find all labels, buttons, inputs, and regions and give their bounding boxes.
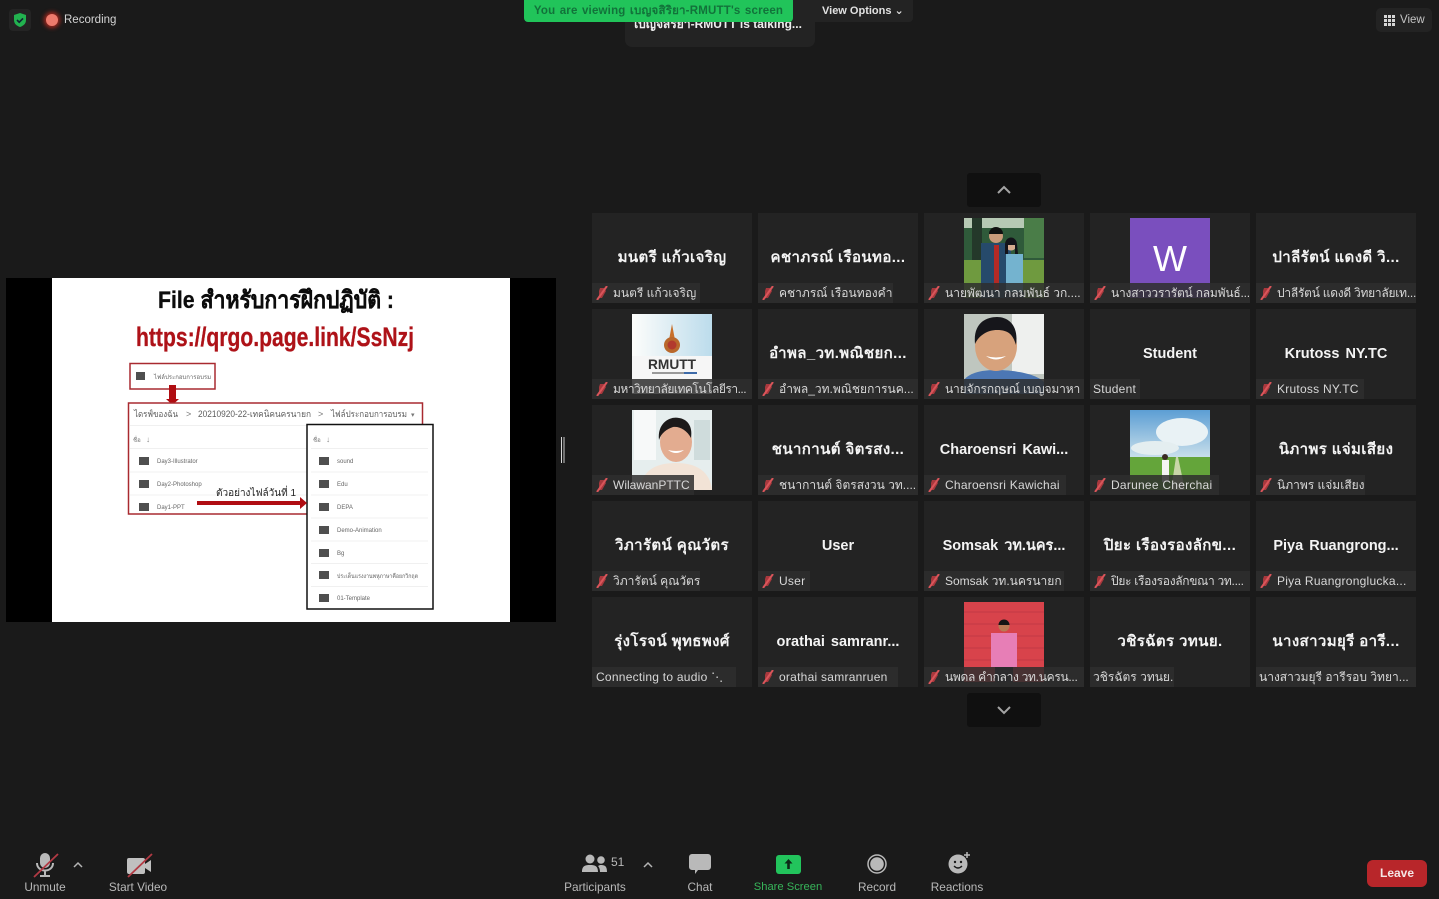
top bar: security shield <box>9 9 31 31</box>
participant tile: Krutoss NY.TC <box>1285 346 1387 362</box>
participant tile <box>1256 405 1416 495</box>
participant tile with red wall photo: นพดล คำกลาง วท.นครน... <box>945 670 1077 684</box>
participant tile: User <box>779 574 805 588</box>
participant tile <box>924 501 1084 591</box>
participant tile: นิภาพร แจ่มเสียง <box>1279 441 1393 458</box>
day 1 folder contents panel: ↓ <box>326 435 330 444</box>
talking indicator pill: เบญจสิริยา-RMUTT is talking... <box>634 17 802 31</box>
participant tile: ปาลีรัตน์ แดงดี วิทยาลัยเท... <box>1277 286 1416 300</box>
participant tile: Charoensri Kawi... <box>940 442 1068 458</box>
participant tile: นางสาวมยุรี อารีรอบ วิทยา... <box>1259 670 1409 684</box>
participant tile connecting audio <box>592 597 752 687</box>
participant tile: ปาลีรัตน์ แดงดี วิ... <box>1272 249 1400 266</box>
folder list panel: ไฟล์ประกอบการอบรม <box>330 408 407 419</box>
toolbar: record: Record <box>858 880 896 894</box>
day 1 folder contents panel <box>307 424 433 609</box>
participant tile <box>758 309 918 399</box>
participant tile <box>1090 309 1250 399</box>
folder list panel: > <box>186 409 191 419</box>
folder list panel: ↓ <box>146 435 150 444</box>
participant tile with couple photo: นายพัฒนา กลมพันธ์ วก.... <box>945 286 1081 300</box>
participant tile: มนตรี แก้วเจริญ <box>613 286 696 300</box>
participant tile: User <box>822 538 854 554</box>
day 1 folder contents panel: Demo-Animation <box>337 528 382 534</box>
participant tile: ปิยะ เรืองรองลักข... <box>1104 537 1236 554</box>
screen share banner <box>524 0 793 22</box>
day 1 folder contents panel: Edu <box>337 482 348 488</box>
slide link: https://qrgo.page.link/SsNzj <box>136 322 414 352</box>
folder list panel <box>128 403 422 514</box>
participant tile <box>592 213 752 303</box>
participant tile: มนตรี แก้วเจริญ <box>618 249 726 266</box>
toolbar: unmute <box>24 853 66 894</box>
day 1 folder contents panel: 01-Template <box>337 596 371 602</box>
participant tile with RMUTT logo: มหาวิทยาลัยเทคโนโลยีรา... <box>613 382 746 396</box>
participant tile with couple photo <box>924 213 1084 303</box>
participant tile with W avatar <box>1090 213 1250 303</box>
participant tile: นิภาพร แจ่มเสียง <box>1277 478 1365 492</box>
folder list panel: 20210920-22-เทคนิคนครนายก <box>198 409 311 419</box>
toolbar: participants <box>564 854 626 894</box>
participant tile: นางสาวมยุรี อารี... <box>1272 633 1400 650</box>
screen share banner: You are viewing เบญจสิริยา-RMUTT's screen <box>534 5 783 17</box>
participant tile <box>592 501 752 591</box>
participant tile with W avatar: นางสาววรารัตน์ กลมพันธ์... <box>1111 286 1250 300</box>
participant tile: Student <box>1143 346 1197 362</box>
view layout button <box>1376 8 1432 32</box>
participant tile with W avatar: W <box>1153 238 1187 279</box>
participant tile: Student <box>1093 382 1136 396</box>
participant tile connecting audio: Connecting to audio ⋱ <box>596 670 723 684</box>
participant tile <box>924 405 1084 495</box>
participant tile <box>758 213 918 303</box>
shared slide <box>6 278 556 622</box>
participant tile: Charoensri Kawichai <box>945 478 1060 492</box>
talking indicator pill <box>625 0 815 47</box>
participant tile <box>1090 501 1250 591</box>
day 1 callout: ตัวอย่างไฟล์วันที่ 1 <box>216 485 296 499</box>
participant tile: ปิยะ เรืองรองลักขณา วท.... <box>1111 574 1244 588</box>
participant tile: orathai samranruen <box>779 670 888 684</box>
scroll up button <box>967 173 1041 207</box>
participant tile <box>1256 213 1416 303</box>
participant tile: Piya Ruangrong... <box>1273 538 1399 554</box>
view layout button: View <box>1400 14 1425 26</box>
toolbar: reactions: Reactions <box>931 880 983 894</box>
participant tile with RMUTT logo: RMUTT <box>648 356 696 372</box>
folder list panel: ไดรฟ์ของฉัน <box>133 408 178 419</box>
view options button <box>780 0 913 22</box>
participant tile: Somsak วท.นคร... <box>943 538 1065 554</box>
toolbar: reactions <box>931 852 983 894</box>
folder list panel: ▾ <box>411 412 415 419</box>
participant tile <box>758 405 918 495</box>
participant tile: วิภารัตน์ คุณวัตร <box>615 537 729 554</box>
day 1 folder contents panel: DEPA <box>337 505 353 511</box>
participant tile <box>758 501 918 591</box>
participant tile with selfie photo <box>592 405 752 495</box>
participant tile: Somsak วท.นครนายก <box>945 574 1062 588</box>
participant tile: orathai samranr... <box>777 634 899 650</box>
participant tile with RMUTT logo <box>592 309 752 399</box>
participant tile: อำพล_วท.พณิชยก... <box>769 345 907 362</box>
participant tile: คชาภรณ์ เรือนทองคำ <box>779 286 892 300</box>
toolbar: share screen: Share Screen <box>754 881 822 893</box>
toolbar: unmute: Unmute <box>24 880 66 894</box>
unmute caret <box>74 862 82 868</box>
toolbar: participants: 51 <box>611 855 624 869</box>
participant tile with portrait photo: นายจักรกฤษณ์ เบญจมาหา <box>945 382 1080 396</box>
participant tile: ชนากานต์ จิตรสงวน วท.... <box>779 478 916 492</box>
toolbar: start video <box>109 853 167 894</box>
toolbar: chat <box>688 854 712 894</box>
leave button: Leave <box>1380 866 1414 880</box>
participant tile <box>1090 597 1250 687</box>
participant tile with portrait photo <box>924 309 1084 399</box>
participant tile with landscape photo: Darunee Cherchai <box>1111 478 1212 492</box>
view options button: View Options ⌄ <box>822 5 904 17</box>
day 1 folder contents panel: ชื่อ <box>313 436 321 444</box>
participant tile with landscape photo <box>1090 405 1250 495</box>
participant tile <box>758 597 918 687</box>
folder list panel: Day1-PPT <box>157 505 185 511</box>
participant tile: ชนากานต์ จิตรสง... <box>772 441 904 458</box>
participants caret <box>644 862 652 868</box>
toolbar: share screen <box>754 855 822 893</box>
participant tile with red wall photo <box>924 597 1084 687</box>
day 1 folder contents panel: sound <box>337 459 353 465</box>
participant tile connecting audio: รุ่งโรจน์ พุทธพงศ์ <box>614 633 730 650</box>
toolbar: participants: Participants <box>564 880 626 894</box>
folder list panel: ชื่อ <box>133 436 141 444</box>
slide title: File สำหรับการฝึกปฏิบัติ : <box>158 287 394 314</box>
participant tile <box>1256 309 1416 399</box>
participant tile: วิภารัตน์ คุณวัตร <box>613 574 700 588</box>
highlighted folder: ไฟล์ประกอบการอบรม <box>153 373 211 381</box>
participant tile: อำพล_วท.พณิชยการนค... <box>779 382 914 396</box>
recording indicator: Recording <box>64 14 116 26</box>
highlighted folder <box>130 364 215 389</box>
folder list panel: Day3-Illustrator <box>157 459 198 465</box>
folder list panel: > <box>318 409 323 419</box>
leave button <box>1367 860 1427 887</box>
scroll down button <box>967 693 1041 727</box>
participant tile: คชาภรณ์ เรือนทอ... <box>771 249 905 266</box>
panel resize handle <box>561 437 562 463</box>
folder list panel: Day2-Photoshop <box>157 482 202 488</box>
arrow right <box>197 497 307 509</box>
participant tile <box>1256 501 1416 591</box>
toolbar: chat: Chat <box>688 880 712 894</box>
participant tile: Piya Ruangronglucka... <box>1277 574 1407 588</box>
participant tile: Krutoss NY.TC <box>1277 382 1359 396</box>
day 1 folder contents panel: ประเด็นแรงงานพหุภาษาคือยกวิกฤต <box>337 571 418 580</box>
participant tile: วชิรฉัตร วทนย. <box>1093 670 1173 684</box>
participant tile with selfie photo: WilawanPTTC <box>613 478 690 492</box>
toolbar: record <box>858 854 896 894</box>
toolbar: start video: Start Video <box>109 880 167 894</box>
recording indicator <box>41 9 116 31</box>
day 1 folder contents panel: Bg <box>337 551 344 557</box>
participant tile: วชิรฉัตร วทนย. <box>1117 633 1223 650</box>
participant tile <box>1256 597 1416 687</box>
arrow down <box>166 385 179 405</box>
